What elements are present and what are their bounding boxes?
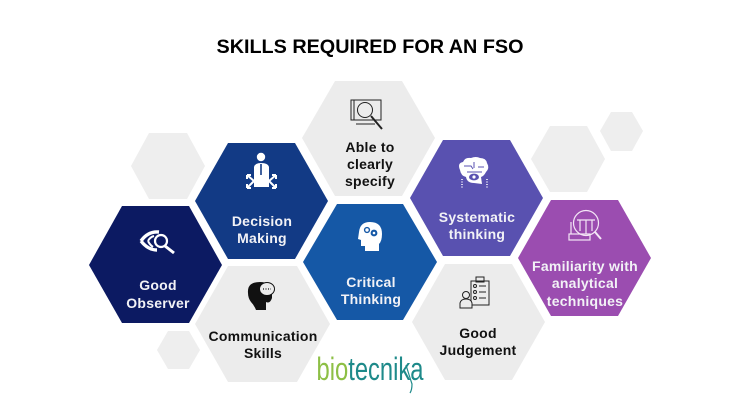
panel: communication skills [195, 266, 330, 382]
label: critical thinking: Critical [346, 274, 396, 290]
panel: familiarity with analytical techniques [518, 200, 651, 316]
label: good observer: Observer [126, 295, 190, 311]
icon: head with gears [358, 222, 382, 251]
label: able to clearly specify: specify [345, 173, 395, 189]
panel: decision making [195, 143, 328, 259]
icon: person with checklist [460, 277, 489, 308]
icon: brain with eye [459, 157, 488, 188]
label: able to clearly specify: clearly [347, 156, 393, 172]
label: good judgement: Judgement [440, 342, 517, 358]
decorative hexagon: small top right [600, 112, 643, 151]
logo: biotecnika: biotecnika [317, 351, 424, 388]
label: good judgement: Good [459, 325, 497, 341]
icon: laptop with magnifier [569, 210, 601, 240]
icon: person with arrows [247, 153, 276, 188]
decorative hexagon: upper left [131, 133, 205, 199]
decorative hexagon: upper right [531, 126, 605, 192]
label: decision making: Making [237, 230, 287, 246]
label: decision making: Decision [232, 213, 292, 229]
label: good observer: Good [139, 277, 177, 293]
label: familiarity with analytical techniques: analytical [552, 275, 618, 291]
panel: good observer [89, 206, 222, 323]
label: systematic thinking: thinking [449, 226, 505, 242]
panel: systematic thinking [410, 140, 543, 256]
icon: head with speech bubble [248, 282, 274, 310]
panel: able to clearly specify [302, 81, 435, 196]
label: systematic thinking: Systematic [439, 209, 515, 225]
label: communication skills: Skills [244, 345, 282, 361]
label: communication skills: Communication [208, 328, 318, 344]
label: able to clearly specify: Able to [345, 139, 395, 155]
decorative hexagon: small bottom left [157, 331, 200, 369]
label: critical thinking: Thinking [341, 291, 401, 307]
panel: good judgement [412, 264, 545, 380]
label: familiarity with analytical techniques: Familiarity with [532, 258, 638, 274]
icon: screen with magnifier [351, 100, 382, 129]
icon: eye with magnifier [141, 232, 174, 253]
label: familiarity with analytical techniques: techniques [547, 293, 623, 309]
title: SKILLS REQUIRED FOR AN FSO [216, 36, 524, 58]
panel: critical thinking [303, 204, 437, 320]
